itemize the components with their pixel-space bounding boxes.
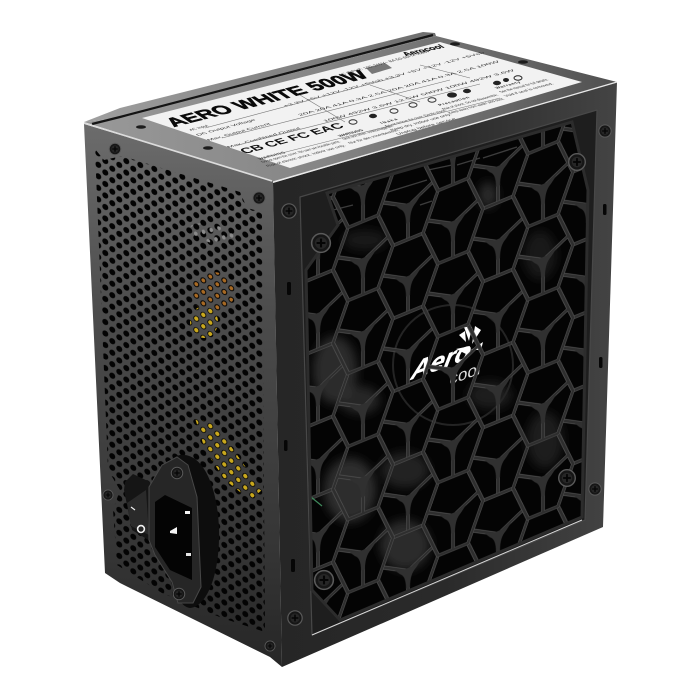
label spec text: Max. Combined Output [226, 126, 303, 148]
logo subword: cool [449, 358, 482, 389]
label spec text: Risk of electric shock. Indoor use only. [265, 144, 347, 167]
label spec text: Warranty [494, 80, 522, 89]
label spec text: Max. Output Current [206, 122, 273, 141]
label wattage badge [366, 63, 392, 74]
label spec text: DC Output Voltage [195, 118, 257, 136]
inlet socket [155, 495, 192, 580]
perforated vent holes [90, 140, 270, 640]
label certification marks: CB CE FC EAC [236, 121, 348, 156]
side screw: upper right [253, 192, 265, 204]
front screw: inner bottom left [315, 571, 333, 589]
glints of internal components [190, 224, 234, 244]
side screw: lower left [103, 490, 113, 500]
panel: top face [84, 32, 617, 182]
inlet back boss [160, 455, 219, 608]
label brand: Aerocool [399, 43, 447, 57]
front screw: outer bottom left [288, 611, 302, 625]
side screw: lower right [265, 641, 275, 651]
fan slats behind grille [334, 146, 517, 210]
label table lines [205, 65, 500, 158]
label spec text: Nur für den Innenbereich. [347, 129, 401, 144]
label spec text: AC Input [188, 124, 210, 131]
label spec text: Gerät nicht öffnen. Stromschlaggefahr. [341, 125, 395, 140]
side screws [109, 143, 121, 155]
label spec text: 20A 20A 41A 0.3A 2.5A 20A 20A 41A 0.3A 2.5A 100W [297, 60, 502, 116]
label spec text: +3.3V +5V +12V -12V +5Vsb +3.3V +5V +12V -12V +5Vsb [282, 51, 487, 107]
power inlet assembly [124, 455, 219, 608]
top back strip [84, 32, 436, 122]
label spec text: Void if seal is removed. [503, 82, 555, 97]
label spec text: 100W 492W 3.6W 12.5W 500W 100W 492W 3.6W [322, 68, 517, 122]
label spec text: Do not open the cover. No user serviceable parts. [260, 140, 342, 163]
label spec text: Ibaka [379, 118, 399, 124]
fan hub outline [393, 305, 513, 425]
panel: front face [273, 82, 617, 667]
front screw: outer top left [282, 204, 296, 218]
fan grille [308, 124, 586, 618]
inlet lower screw [173, 588, 185, 600]
front screw: outer bottom right [589, 483, 601, 495]
logo word: Aero [408, 335, 475, 386]
rocker switch [124, 474, 150, 541]
label spec text: Precaution [437, 96, 471, 106]
wire detail [311, 497, 322, 506]
label spec text: See the manual for full details. [498, 78, 550, 93]
label title: AERO WHITE 500W [161, 68, 375, 130]
frame bottom highlight [312, 520, 582, 635]
label spec text [188, 50, 555, 167]
label spec text: WARNUNG [337, 128, 365, 137]
inlet screws [171, 467, 183, 479]
frame slots [284, 204, 606, 572]
spec label [142, 42, 582, 168]
logo fan mark [456, 326, 483, 354]
inlet plate [149, 457, 201, 603]
top mounting slots [136, 42, 528, 150]
front screw: outer top right [599, 125, 611, 137]
label spec text: AC INPUT: 100-240V~ 8A 50-60Hz 500W [337, 50, 431, 76]
label spec text: Unplug before service. [395, 117, 459, 135]
top cover [84, 36, 617, 182]
fan blades [313, 182, 563, 570]
label spec text: Do not remove the cover. Electric shock. [384, 109, 448, 127]
grille ribs [308, 126, 586, 618]
front screw: inner top left [312, 234, 330, 252]
label spec text: Risk of shock. Do not disassemble. [441, 93, 500, 110]
brand logo [410, 326, 483, 384]
product illustration: power supply unit [84, 32, 617, 667]
label spec text: WARNING [257, 151, 287, 160]
front screw: inner top right [569, 154, 585, 170]
label compliance icons [349, 76, 522, 124]
label spec text: Keep dry. Indoor use only. [389, 113, 453, 131]
panel: side face [84, 123, 282, 667]
grille outline [306, 122, 588, 620]
front screw: inner bottom right [559, 470, 575, 486]
recessed frame [300, 110, 597, 635]
label spec text: Keep away from water and dust. [447, 97, 506, 114]
